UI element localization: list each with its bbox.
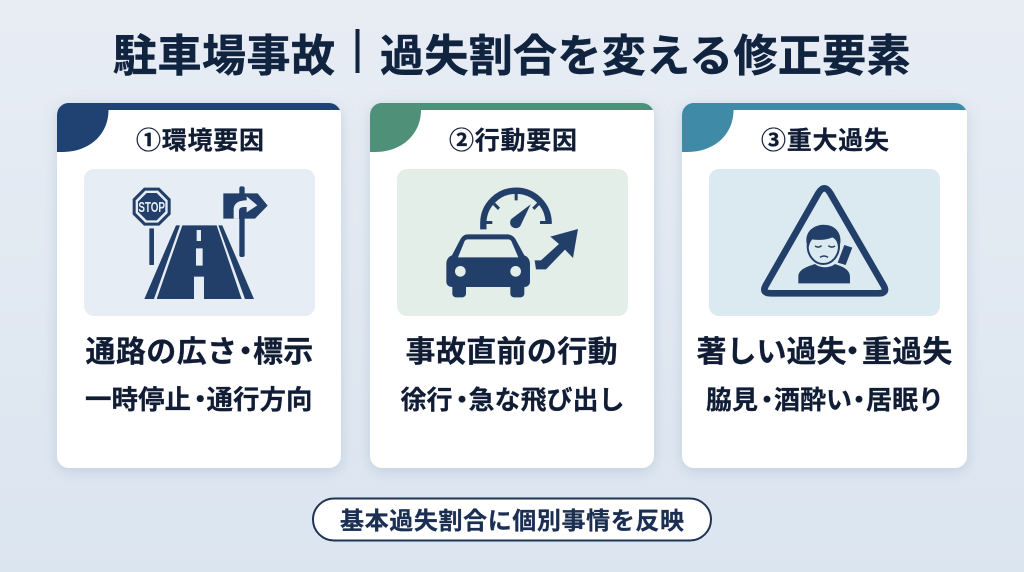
icon: stop sign, road and direction sign: STOP — [138, 200, 165, 216]
text: examples of gross negligence: 脇見 — [706, 385, 758, 415]
text: slow driving and running out: ・ — [449, 385, 475, 415]
heading: gross negligence: ③重大過失 — [761, 127, 889, 155]
heading: behavior factors: ②行動要因 — [449, 127, 577, 155]
text: serious negligence: 著しい過失 — [696, 336, 846, 369]
text: width and signage: ・ — [231, 336, 261, 369]
text: examples of gross negligence: 居眠り — [866, 385, 944, 415]
panel: behavior factors — [370, 103, 654, 468]
text: examples of gross negligence: ・ — [846, 385, 872, 415]
text: action before accident: 事故直前の行動 — [406, 336, 618, 369]
text: examples of gross negligence: 酒酔い — [774, 385, 852, 415]
icon: speedometer, car and rising arrow — [446, 191, 578, 297]
heading: environmental factors: ①環境要因 — [136, 127, 264, 155]
text: width and signage: 通路の広さ — [86, 336, 238, 369]
title: 駐車場事故 — [113, 32, 336, 81]
card accent: navy corner — [57, 103, 341, 152]
text: stop and direction: 通行方向 — [206, 385, 312, 415]
text: serious negligence: 重過失 — [862, 336, 953, 369]
text: stop and direction: 一時停止 — [85, 385, 191, 415]
icon panel: warning triangle — [709, 169, 940, 316]
panel: gross negligence — [682, 103, 967, 468]
title: 過失割合を変える修正要素 — [380, 32, 911, 81]
title — [113, 29, 911, 81]
callout pill — [313, 498, 711, 540]
icon panel: road and signs — [84, 169, 315, 316]
card accent: green corner — [370, 103, 654, 152]
text: width and signage: 標示 — [253, 336, 313, 369]
text: serious negligence: ・ — [838, 336, 868, 369]
text: slow driving and running out: 急な飛び出し — [468, 385, 625, 415]
text: slow driving and running out: 徐行 — [400, 385, 453, 415]
panel: environmental factors — [57, 103, 341, 468]
text: examples of gross negligence: ・ — [754, 385, 780, 415]
icon panel: car and speedometer — [397, 169, 628, 316]
icon: warning triangle with drowsy driver on phone — [764, 188, 885, 293]
callout text: 基本過失割合に個別事情を反映 — [340, 508, 684, 535]
text: stop and direction: ・ — [187, 385, 214, 415]
icon: stop sign, road and direction sign — [133, 186, 268, 299]
card accent: teal corner — [682, 103, 967, 152]
